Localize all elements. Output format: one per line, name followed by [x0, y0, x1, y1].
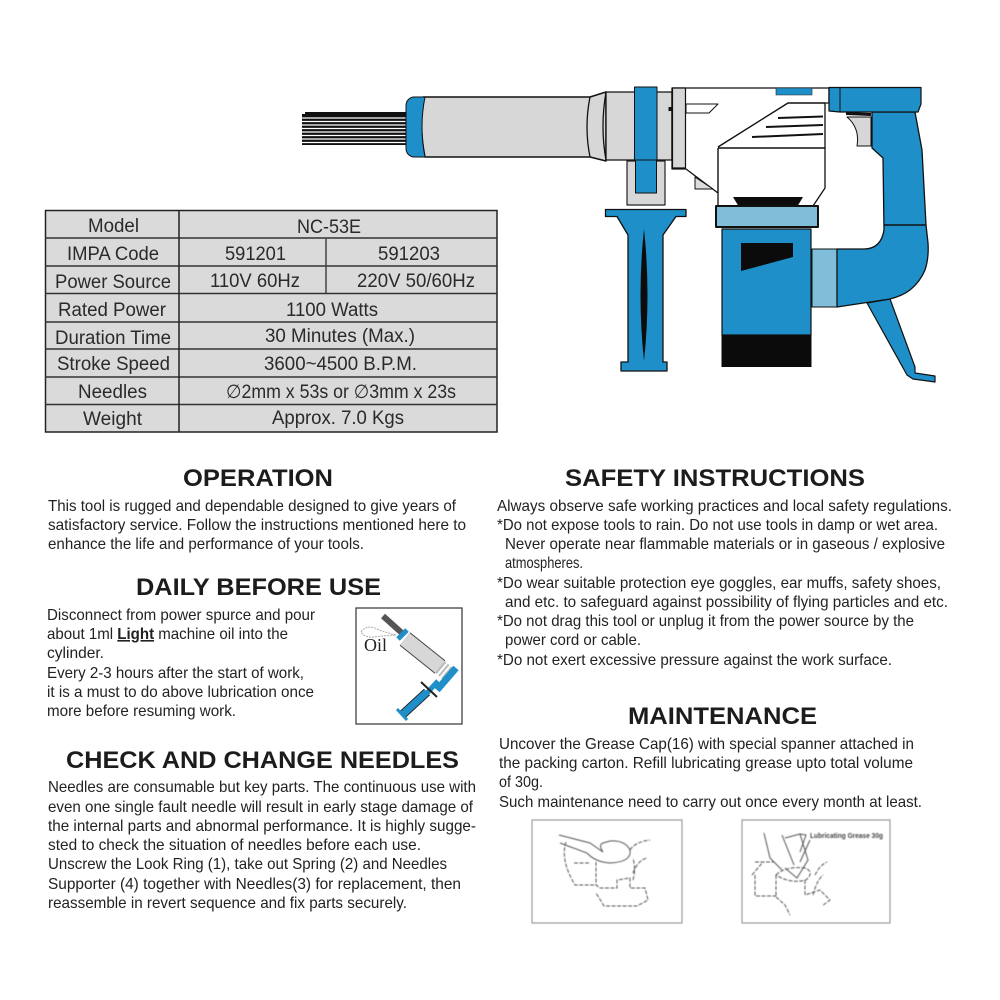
front collar [406, 97, 425, 157]
table text: IMPA Code [67, 244, 159, 265]
rear grip leg [867, 299, 935, 382]
table text: Power Source [55, 272, 171, 293]
text block: daily before use: about 1ml Light machine oil into the [47, 626, 288, 643]
text block: operation: This tool is rugged and dependable designed to give years of [48, 498, 457, 515]
table text: 3600~4500 B.P.M. [264, 354, 417, 375]
blue rear head [829, 88, 921, 112]
table text: Needles [78, 382, 147, 403]
text block: safety instructions: and etc. to safeguard against possibility of flying particles and etc. [505, 594, 948, 611]
table text: 30 Minutes (Max.) [265, 326, 415, 347]
side handle bracket [627, 161, 665, 205]
icon: oil lubrication diagram [356, 608, 462, 724]
table text: Rated Power [58, 300, 167, 321]
mid housing [587, 92, 672, 160]
text block: daily before use: cylinder. [47, 645, 104, 662]
illustration: needle scaler tool [300, 87, 935, 382]
text block: check and change needles: even one single fault needle will result in early stage damage of [48, 799, 474, 816]
text block: safety instructions: *Do not exert excessive pressure against the work surface. [497, 652, 892, 669]
text block: check and change needles: Needles are consumable but key parts. The continuous use with [48, 779, 476, 796]
table text: 110V 60Hz [210, 271, 300, 292]
text block: safety instructions: power cord or cable. [505, 632, 641, 649]
table text: Duration Time [55, 328, 171, 349]
heading: operation: OPERATION [183, 465, 333, 492]
text block: daily before use: it is a must to do above lubrication once [47, 684, 314, 701]
text block: operation: satisfactory service. Follow the instructions mentioned here to [48, 517, 466, 534]
light blue motor ring [716, 206, 818, 227]
oil label: Oil [364, 635, 387, 655]
text block: check and change needles: reassemble in revert sequence and fix parts securely. [48, 895, 407, 912]
table text: 591201 [225, 244, 286, 265]
text block: safety instructions: *Do not drag this tool or unplug it from the power source by the [497, 613, 914, 630]
text block: operation [48, 498, 466, 553]
gray trigger insert [846, 114, 871, 146]
blue band [634, 87, 657, 193]
diagram: lubricating grease refill [742, 820, 890, 923]
table text: NC-53E [297, 217, 361, 238]
side handle [606, 210, 686, 371]
text block: daily before use [47, 607, 316, 720]
table text: Stroke Speed [57, 354, 170, 375]
text block: check and change needles [48, 779, 476, 912]
table text: 591203 [378, 244, 440, 265]
table text: ∅2mm x 53s or ∅3mm x 23s [226, 382, 456, 403]
table text: 1100 Watts [286, 300, 378, 321]
text block: maintenance: Uncover the Grease Cap(16) with special spanner attached in [499, 736, 914, 753]
text block: maintenance [499, 736, 922, 811]
text block: safety instructions: Always observe safe working practices and local safety regulations. [497, 498, 952, 515]
text block: daily before use: Disconnect from power spurce and pour [47, 607, 316, 624]
text block: maintenance: of 30g. [499, 774, 543, 791]
diagram: spanner on grease cap [532, 820, 682, 923]
table grid [45, 210, 497, 432]
main handle [837, 112, 928, 307]
table text: Model [88, 216, 139, 237]
text block: check and change needles: Supporter (4) together with Needles(3) for replacement, then [48, 876, 461, 893]
text block: daily before use: Every 2-3 hours after the start of work, [47, 665, 304, 682]
text block: maintenance: Such maintenance need to carry out once every month at least. [499, 794, 922, 811]
text block: maintenance: the packing carton. Refill lubricating grease upto total volume [499, 755, 913, 772]
heading: safety instructions: SAFETY INSTRUCTIONS [565, 465, 865, 492]
heading: maintenance: MAINTENANCE [628, 703, 817, 730]
light blue connector [812, 249, 837, 307]
text block: daily before use: more before resuming work. [47, 703, 236, 720]
grease label: Lubricating Grease 30g [810, 833, 883, 840]
needle bundle [300, 111, 406, 145]
motor casing white body [672, 88, 829, 207]
text block: safety instructions: atmospheres. [505, 555, 583, 572]
gray strip [668, 88, 686, 168]
mini tool [383, 616, 456, 720]
text block: safety instructions: *Do not expose tools to rain. Do not use tools in damp or wet area. [497, 517, 938, 534]
text block: safety instructions: Never operate near flammable materials or in gaseous / explosive [505, 536, 945, 553]
cylinder barrel [421, 92, 606, 161]
blue motor box [722, 229, 812, 367]
text block: safety instructions: *Do wear suitable protection eye goggles, ear muffs, safety shoes, [497, 575, 941, 592]
table text: Weight [83, 409, 143, 430]
specification table [45, 210, 497, 432]
table text: Approx. 7.0 Kgs [272, 408, 404, 429]
text block: safety instructions [497, 498, 952, 669]
text block: check and change needles: sted to check the situation of needles before each use. [48, 837, 421, 854]
heading: daily before use: DAILY BEFORE USE [136, 574, 381, 601]
heading: check and change needles: CHECK AND CHANGE NEEDLES [66, 747, 459, 774]
oil drop [361, 627, 396, 637]
text block: check and change needles: the internal parts and abnormal performance. It is highly sugge- [48, 818, 476, 835]
text block: check and change needles: Unscrew the Look Ring (1), take out Spring (2) and Needles [48, 856, 447, 873]
table text [55, 216, 475, 430]
table text: 220V 50/60Hz [357, 271, 475, 292]
text block: operation: enhance the life and performance of your tools. [48, 536, 364, 553]
